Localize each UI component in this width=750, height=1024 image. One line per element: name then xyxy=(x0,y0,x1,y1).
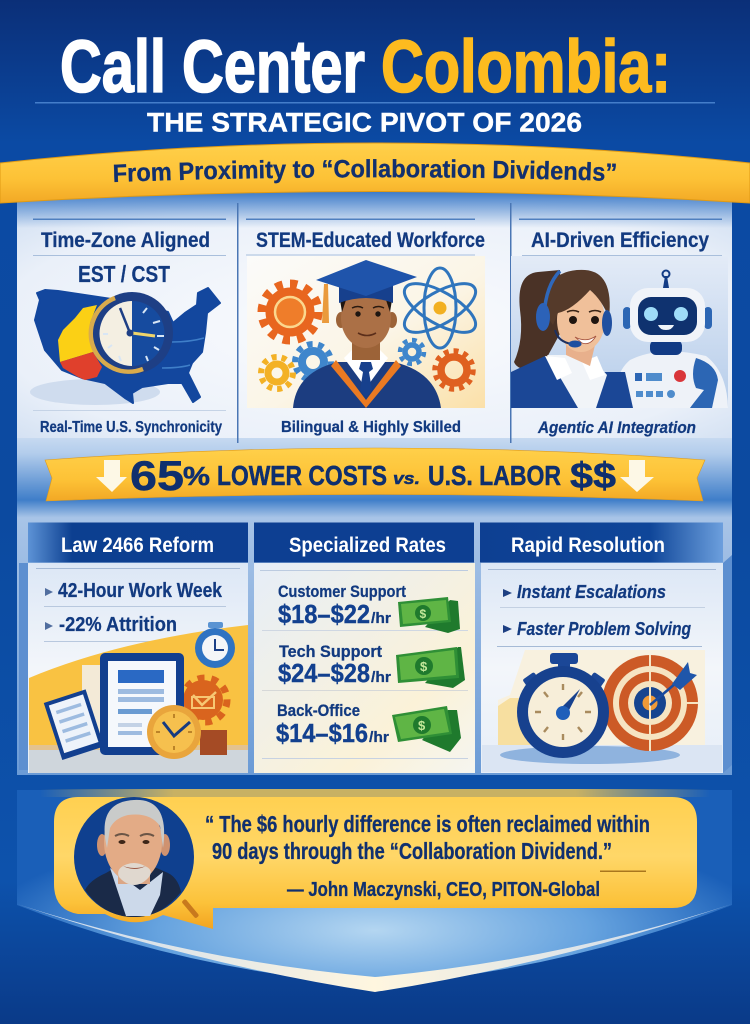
title: Call Center: Call Center xyxy=(60,25,365,108)
heading: Rapid Resolution xyxy=(511,534,665,557)
icon: cash xyxy=(396,647,465,688)
rate: back office: $14–$16 xyxy=(276,718,368,748)
panel: Law 2466 Reform xyxy=(19,522,248,773)
caption: Bilingual & Highly Skilled xyxy=(281,419,461,436)
quote text xyxy=(205,811,650,864)
bullet: Faster Problem Solving: Faster Problem Solving xyxy=(517,618,691,639)
column: AI efficiency xyxy=(511,218,728,437)
heading: Law 2466 Reform xyxy=(61,534,214,557)
bullet: Instant Escalations: Instant Escalations xyxy=(517,581,666,602)
bullet: -22% Attrition: -22% Attrition xyxy=(59,614,177,636)
icon: atom xyxy=(397,268,483,348)
rate: customer support xyxy=(278,582,460,633)
heading: STEM-Educated Workforce xyxy=(256,229,485,252)
rate: tech support: $24–$28 xyxy=(278,658,370,688)
caption: Agentic AI Integration xyxy=(537,419,696,437)
portrait: John Maczynski xyxy=(74,797,194,917)
rate: back office: /hr xyxy=(369,729,389,746)
stat text: $$ xyxy=(570,455,616,496)
illustration: stopwatch and target xyxy=(482,650,722,772)
banner text: From Proximity to “Collaboration Dividends” xyxy=(114,159,616,184)
quote text: 90 days through the “Collaboration Dividend.” xyxy=(212,838,612,864)
icon: box xyxy=(200,730,227,755)
column: time zone xyxy=(30,218,226,436)
quote callout xyxy=(54,797,697,929)
header bar xyxy=(480,522,723,562)
cost savings ribbon xyxy=(45,448,705,501)
icon: cash: $ xyxy=(418,718,426,733)
stat text: LOWER COSTS xyxy=(217,460,387,491)
icon: cash: $ xyxy=(420,659,428,674)
panel: Rapid Resolution xyxy=(480,522,732,773)
header bar xyxy=(254,522,474,562)
icon: orange gear xyxy=(262,284,318,340)
stat text: U.S. LABOR xyxy=(428,460,561,491)
subtitle: THE STRATEGIC PIVOT OF 2026 xyxy=(147,108,582,138)
heading: Time-Zone Aligned xyxy=(41,229,210,252)
icon: down arrow left xyxy=(96,460,127,492)
stat text: 65 xyxy=(130,452,184,499)
column: STEM workforce xyxy=(246,218,485,436)
figure: graduate xyxy=(293,260,441,408)
icon: paper sheet xyxy=(44,689,104,760)
bottom chevron panel xyxy=(17,789,732,992)
rate: customer support: $18–$22 xyxy=(278,599,370,629)
icon: tablet xyxy=(100,653,184,755)
caption: Real-Time U.S. Synchronicity xyxy=(40,419,222,436)
subheading: EST / CST xyxy=(78,261,170,287)
rate: tech support: /hr xyxy=(371,669,391,686)
header bar xyxy=(28,522,248,562)
icon: cash xyxy=(392,706,461,752)
icon: stopwatch xyxy=(517,653,609,758)
icon: cash: $ xyxy=(420,607,426,621)
panel: top three features xyxy=(17,192,732,443)
icon: yellow gear xyxy=(261,357,293,389)
yellow arched banner xyxy=(0,142,750,204)
attribution: — John Maczynski, CEO, PITON-Global xyxy=(287,879,600,901)
illustration background xyxy=(247,256,485,408)
icon: cash xyxy=(398,597,460,633)
rate: back office xyxy=(276,701,461,752)
icon: target xyxy=(602,655,698,751)
illustration: documents and clock xyxy=(29,622,248,773)
rate: customer support: Customer Support xyxy=(278,582,406,601)
icon: stopwatch xyxy=(195,622,235,668)
quote text: “ The $6 hourly difference is often reclaimed within xyxy=(205,811,650,837)
icon: wall clock xyxy=(147,705,201,759)
stat text: % xyxy=(183,461,210,491)
illustration background xyxy=(511,256,728,408)
stat text: vs. xyxy=(393,469,420,488)
icon: gear with check xyxy=(183,678,227,722)
figure: robot xyxy=(616,270,728,408)
bullet: 42-Hour Work Week: 42-Hour Work Week xyxy=(58,580,223,602)
icon: down arrow right xyxy=(620,460,654,492)
stat text xyxy=(130,452,616,499)
icon: US map with clock xyxy=(30,288,220,405)
icon: small blue gear xyxy=(400,340,424,364)
speech bubble xyxy=(54,797,697,929)
heading: Specialized Rates xyxy=(289,534,446,557)
icon: blank sheet behind tablet xyxy=(82,665,102,735)
rate: customer support: /hr xyxy=(371,610,391,627)
title: Colombia: Colombia: xyxy=(381,25,671,108)
icon: orange gear right xyxy=(435,351,473,389)
rate: tech support xyxy=(278,642,465,688)
rate: back office: Back-Office xyxy=(277,701,360,720)
panel: Specialized Rates xyxy=(254,522,475,773)
rate: tech support: Tech Support xyxy=(279,642,382,661)
icon: blue gear xyxy=(295,344,331,380)
figure: agent with headset xyxy=(511,270,633,408)
header: title block xyxy=(35,25,715,138)
heading: AI-Driven Efficiency xyxy=(531,229,709,252)
